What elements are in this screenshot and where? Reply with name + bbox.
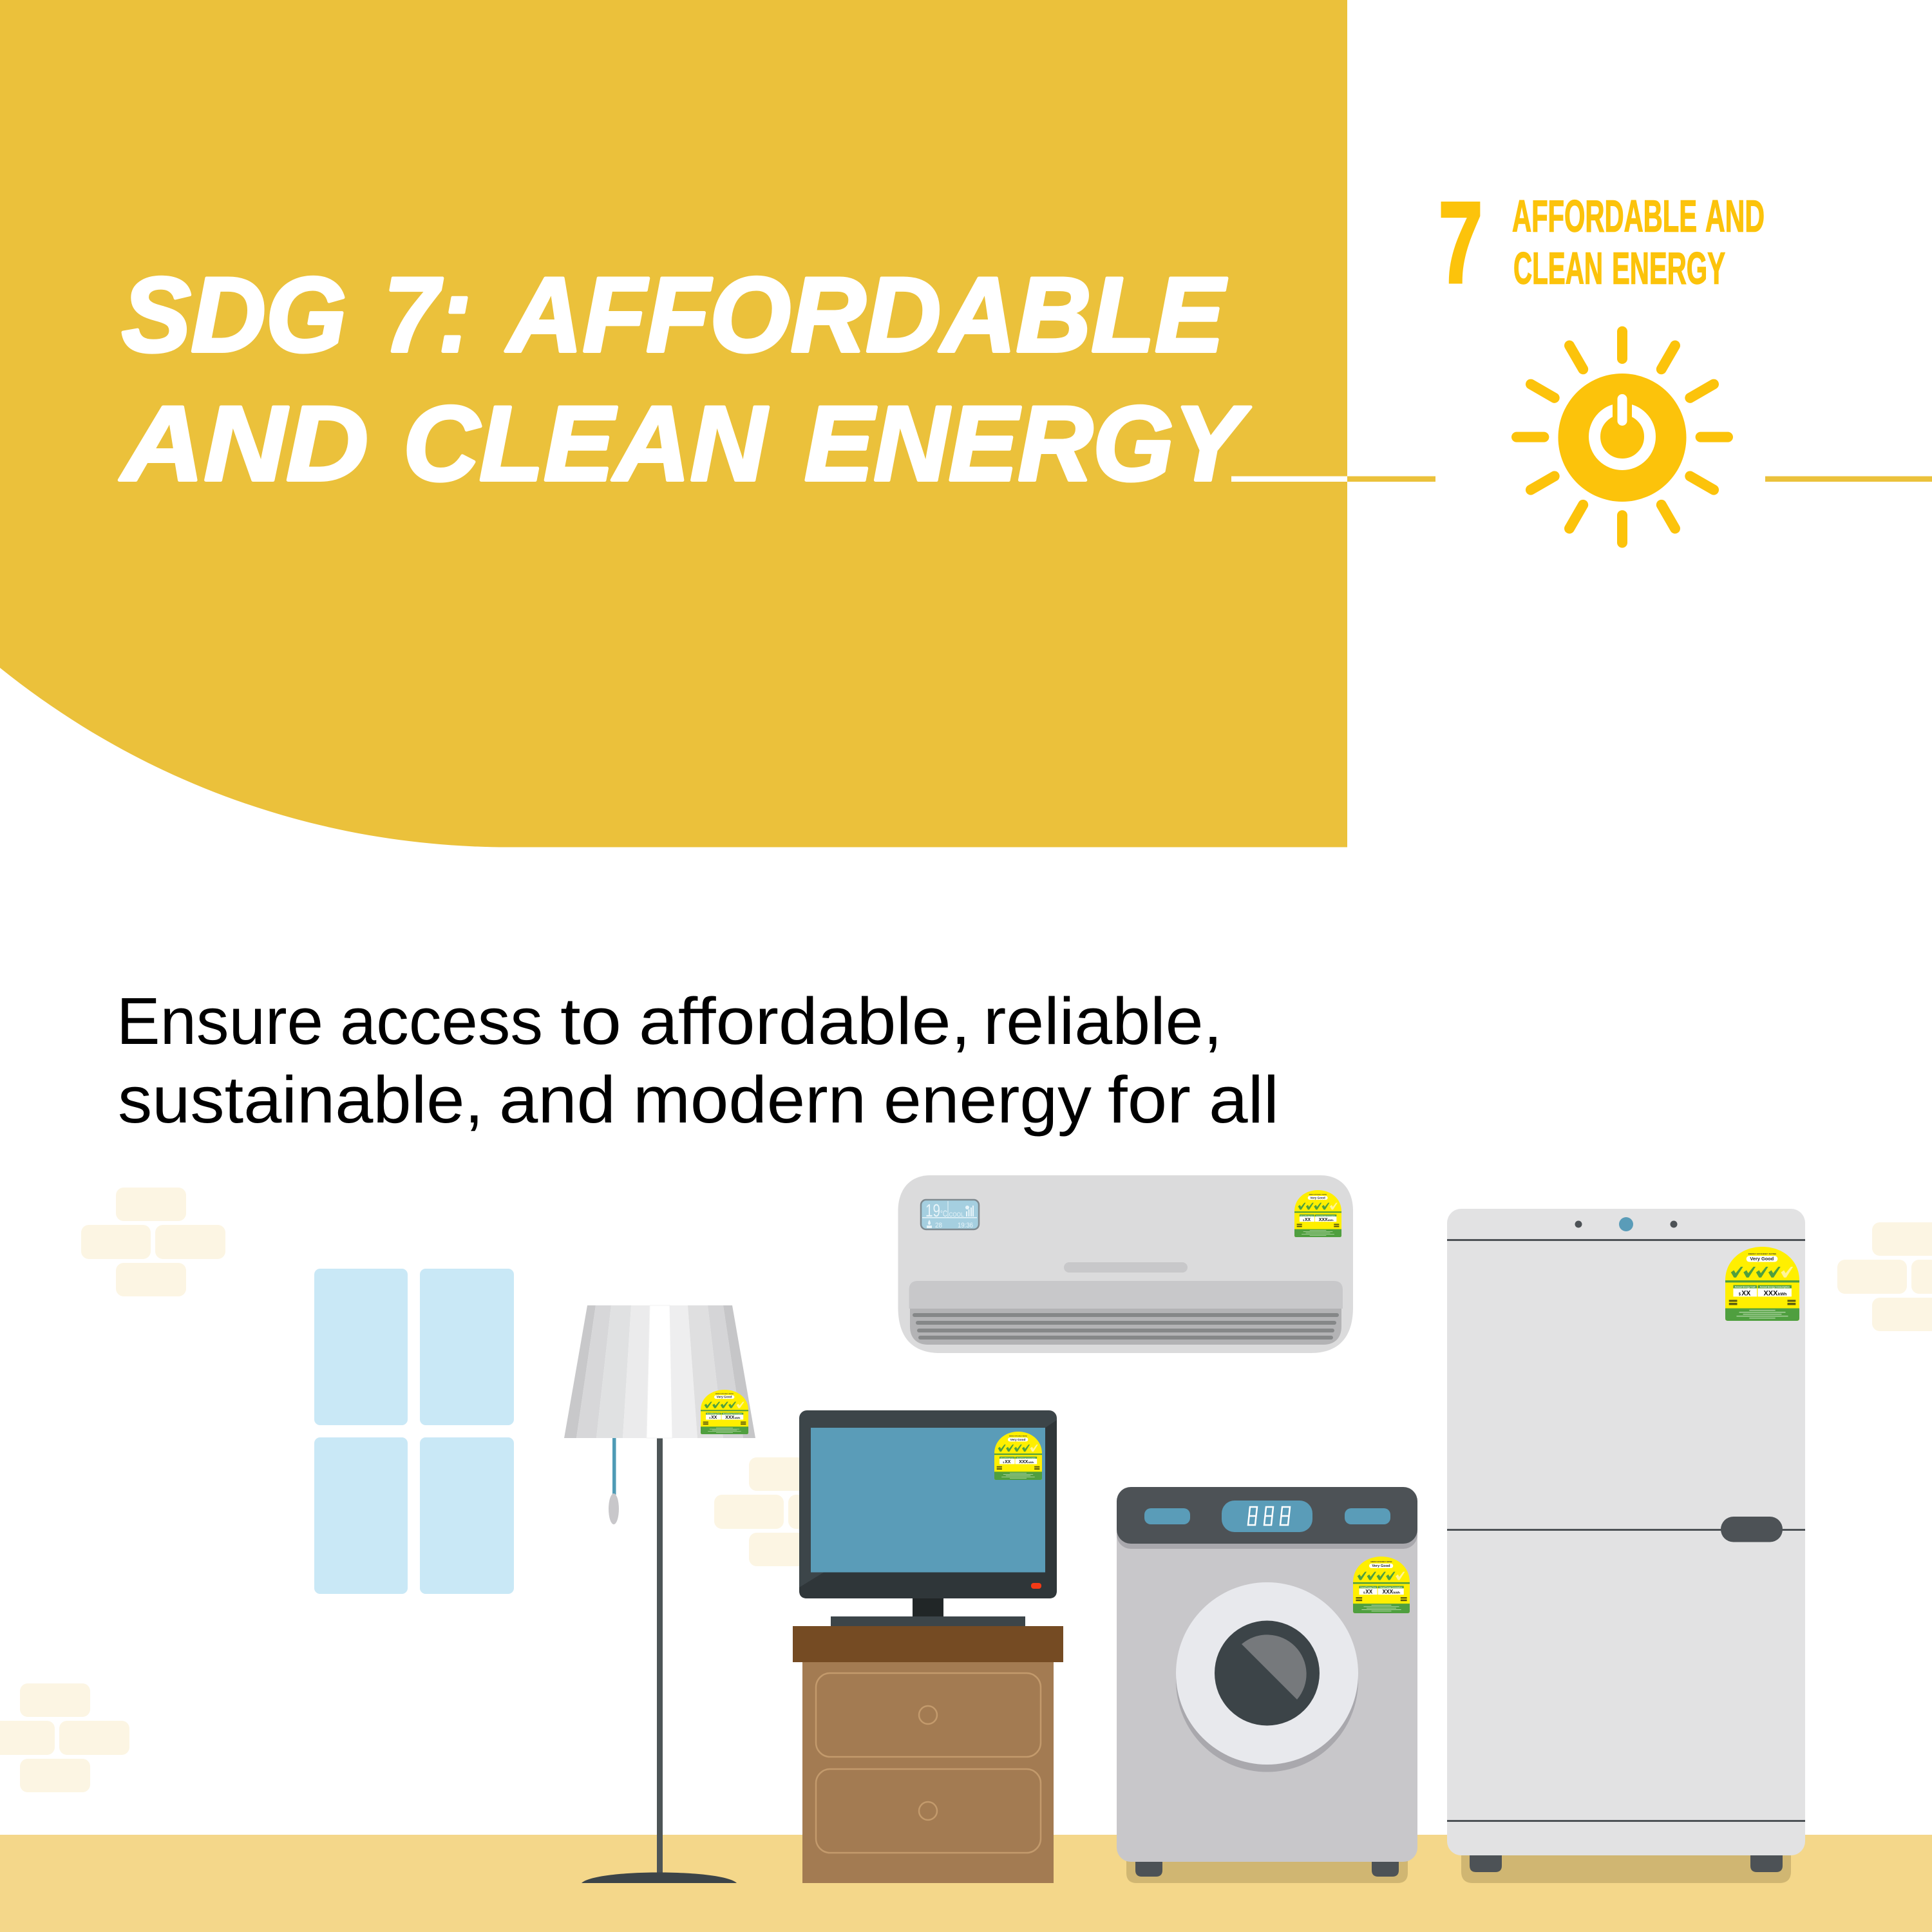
energy label on lamp: $ [709,1417,711,1419]
lamp pole and base [582,1438,737,1883]
text block: goal statement: for [1108,1063,1191,1137]
energy label on TV: Annual Energy Cost [1000,1457,1014,1459]
cabinet top [793,1626,1063,1662]
TV stand [831,1598,1025,1626]
AC vent [910,1309,1341,1345]
washer panel shadow [1117,1492,1417,1549]
wall bricks: upper left [81,1188,225,1296]
energy label on washer: kWh [1394,1591,1400,1595]
energy label on fridge: XX [1741,1289,1751,1297]
energy label on TV: kWh [1028,1461,1034,1464]
TV frame [799,1410,1057,1598]
window [314,1269,514,1594]
SDG 7 badge text: AND [1705,191,1765,241]
heading: SDG 7 title [119,255,1251,502]
heading: SDG 7 title: ENERGY [804,384,1251,502]
heading: SDG 7 title: AFFORDABLE [505,255,1227,374]
AC body [898,1175,1353,1353]
AC lower panel [909,1281,1343,1309]
energy label on AC: kWh [1328,1219,1334,1222]
TV frame shadow [799,1420,1057,1598]
icon: sun with power symbol [1517,332,1728,543]
SDG 7 badge text: AFFORDABLE [1512,191,1697,241]
text block: goal statement: Ensure [117,984,323,1058]
energy label on TV [994,1432,1042,1480]
energy label on washer: Very Good [1372,1564,1390,1568]
energy label on washer: Annual Energy Consumption [1379,1586,1403,1589]
energy label on lamp: Annual Energy Consumption [723,1413,743,1415]
text block: goal statement: to [560,984,621,1058]
energy label on fridge: kWh [1778,1293,1787,1296]
TV power light [1031,1583,1041,1589]
cabinet body [802,1662,1054,1883]
text block: goal statement [117,984,1279,1137]
fridge floor shadow [1461,1848,1791,1883]
energy label on AC: ENERGY EFFICIENCY RATING [1309,1193,1327,1195]
washer buttons [1144,1501,1390,1532]
energy label on fridge: XXX [1764,1289,1778,1297]
washing machine [1117,1487,1417,1883]
refrigerator [1447,1209,1805,1883]
energy label on fridge: Annual Energy Cost [1735,1286,1756,1289]
fridge door lines [1447,1239,1805,1822]
text block: goal statement: energy [884,1063,1092,1137]
energy label on TV: ENERGY EFFICIENCY RATING [1009,1435,1027,1437]
fridge feet [1470,1848,1783,1872]
energy label on lamp: kWh [735,1417,741,1419]
energy label on fridge: $ [1739,1293,1741,1296]
washer floor shadow [1126,1855,1408,1883]
heading: SDG 7 title: SDG [122,255,346,374]
energy label on washer [1353,1557,1410,1613]
energy label on TV: Very Good [1010,1438,1026,1442]
energy label on lamp: ENERGY EFFICIENCY RATING [715,1393,734,1395]
washer door [1176,1582,1358,1772]
energy label on AC: Annual Energy Cost [1300,1215,1314,1217]
energy label on washer: XX [1365,1589,1372,1595]
text block: goal statement: affordable, [639,984,971,1058]
lamp shade [564,1305,755,1438]
energy label on AC [1294,1190,1341,1237]
washer feet [1135,1855,1399,1877]
floor lamp [564,1305,755,1883]
energy label on lamp: XX [711,1415,717,1420]
text block: goal statement: modern [633,1063,866,1137]
AC display: 19 [925,1200,940,1220]
television [799,1410,1057,1626]
wall bricks: right edge [1837,1222,1932,1331]
heading: SDG 7 title: 7: [384,255,471,374]
SDG 7 badge text [1439,178,1765,307]
washer control panel [1117,1487,1417,1544]
washer body [1117,1501,1417,1862]
AC display: COOL [949,1211,963,1218]
energy label on TV: $ [1003,1461,1005,1464]
washer digital display 888 [1248,1507,1290,1525]
lamp pull cord [609,1438,619,1524]
AC display: °C [940,1208,947,1218]
energy label on lamp [701,1390,748,1434]
text block: goal statement: access [340,984,543,1058]
energy label on lamp: Very Good [717,1396,732,1399]
connector line to SDG icon [1231,477,1932,482]
heading: SDG 7 title: CLEAN [403,384,768,502]
AC handle [1064,1262,1188,1273]
text block: goal statement: and [499,1063,616,1137]
fridge handle [1721,1517,1783,1542]
fridge body [1447,1209,1805,1855]
SDG 7 badge text: ENERGY [1612,243,1725,294]
cabinet [793,1626,1063,1883]
text block: goal statement: all [1209,1063,1279,1137]
drawers [816,1673,1041,1853]
energy label on fridge [1725,1247,1799,1321]
fridge indicator lights [1575,1217,1677,1231]
text block: goal statement: sustainable, [118,1063,484,1137]
energy label on lamp: XXX [725,1415,735,1420]
energy label on washer: Annual Energy Cost [1360,1586,1376,1589]
air conditioner [898,1175,1353,1353]
AC display: 28 [935,1222,942,1229]
heading: SDG 7 title: AND [119,384,368,502]
energy label on TV: XX [1005,1459,1010,1464]
energy label on fridge: Annual Energy Consumption [1760,1286,1790,1289]
energy label on TV: XXX [1019,1459,1028,1464]
energy label on AC: Very Good [1310,1196,1325,1199]
energy label on fridge: ENERGY EFFICIENCY RATING [1748,1253,1777,1255]
TV screen [811,1428,1045,1573]
energy label on washer: $ [1363,1591,1365,1595]
energy label on fridge: Very Good [1750,1256,1774,1262]
wall bricks: behind TV [714,1457,858,1566]
energy label on AC: $ [1303,1219,1305,1222]
energy label on lamp: Annual Energy Cost [706,1413,720,1415]
panel: yellow header block [0,0,1347,848]
SDG 7 badge text: 7 [1439,178,1482,307]
text block: goal statement: reliable, [983,984,1222,1058]
AC display [921,1200,979,1229]
wall bricks: lower left [0,1683,129,1792]
energy label on washer: ENERGY EFFICIENCY RATING [1370,1561,1392,1563]
energy label on AC: XXX [1319,1217,1328,1222]
AC display: 19:36 [958,1222,973,1229]
energy label on AC: Annual Energy Consumption [1316,1215,1336,1217]
energy label on AC: XX [1305,1217,1311,1222]
SDG 7 badge text: CLEAN [1513,243,1603,294]
energy label on TV: Annual Energy Consumption [1017,1457,1036,1459]
floor [0,1835,1932,1932]
energy label on washer: XXX [1383,1589,1393,1595]
